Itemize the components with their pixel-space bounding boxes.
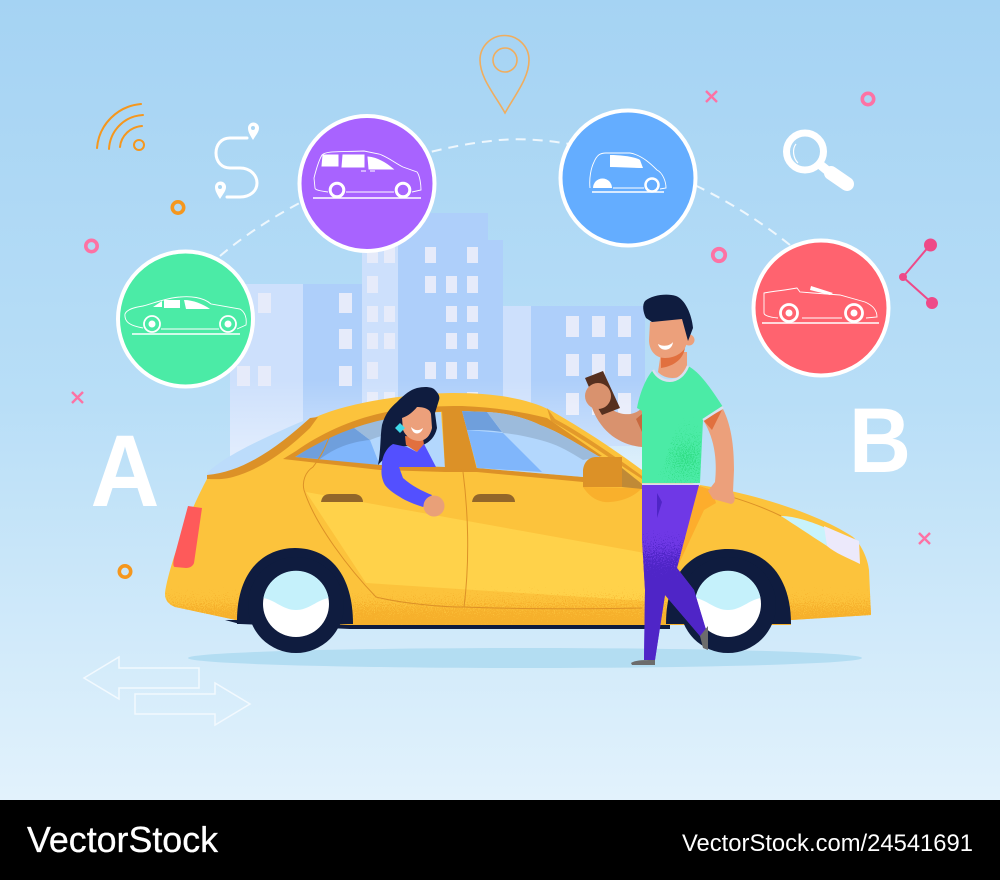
footer bar bbox=[0, 800, 1000, 880]
hand bbox=[424, 496, 444, 516]
rear glass reflection bbox=[207, 417, 318, 480]
front wheel bbox=[666, 549, 791, 653]
decorative cross: left bbox=[72, 392, 83, 403]
trousers crease bbox=[657, 493, 662, 518]
rear window bbox=[295, 412, 445, 467]
letter A: A bbox=[90, 414, 160, 528]
door seams bbox=[303, 435, 642, 609]
circle: purple van bbox=[300, 116, 434, 251]
decorative ring: orange upper bbox=[172, 202, 184, 213]
rear wheel bbox=[237, 548, 353, 653]
ground shadow bbox=[188, 648, 862, 668]
hood seam bbox=[700, 487, 781, 516]
side mirror bbox=[583, 487, 642, 502]
door handle front bbox=[472, 494, 515, 502]
underbody bbox=[225, 620, 670, 629]
neck bbox=[405, 436, 424, 452]
circle: blue city car bbox=[560, 110, 696, 246]
man with phone bbox=[585, 295, 735, 665]
decorative ring: orange lower bbox=[119, 566, 131, 577]
hair bbox=[378, 387, 439, 465]
arrows: two directions bbox=[84, 657, 250, 725]
earring bbox=[395, 423, 405, 433]
smile bbox=[658, 342, 673, 350]
front fender shadow bbox=[660, 485, 716, 570]
door highlight bbox=[306, 492, 645, 601]
taxi car bbox=[160, 393, 875, 653]
trousers bbox=[642, 485, 707, 660]
sleeve shadow bbox=[703, 410, 722, 430]
icon: wifi signal bbox=[97, 104, 144, 150]
decorative ring: pink top right bbox=[862, 93, 874, 105]
icon: small car outline bbox=[590, 153, 666, 192]
t-shirt grain bbox=[655, 415, 702, 483]
ear bbox=[684, 334, 694, 346]
near arm bbox=[591, 405, 642, 447]
circle: green sedan bbox=[118, 252, 253, 386]
decorative ring: pink left bbox=[86, 240, 97, 252]
door handle rear bbox=[321, 494, 363, 502]
logo text: VectorStock bbox=[27, 819, 219, 860]
sleeve cuff shadow bbox=[636, 414, 642, 432]
t-shirt bbox=[637, 366, 723, 483]
woman driver bbox=[378, 387, 444, 516]
tail light bbox=[173, 506, 202, 568]
neck bbox=[658, 352, 687, 378]
far arm bbox=[703, 409, 735, 504]
far shoe bbox=[700, 626, 708, 650]
icon: share nodes bbox=[899, 238, 938, 309]
city buildings bbox=[230, 213, 645, 470]
headlight bbox=[781, 516, 827, 546]
phone bbox=[585, 371, 620, 415]
face bbox=[402, 407, 432, 441]
smile bbox=[411, 427, 423, 434]
icon: convertible outline bbox=[762, 286, 879, 323]
icon: map pin bbox=[480, 36, 529, 113]
hand bbox=[585, 383, 611, 409]
decorative cross: right bbox=[919, 533, 930, 544]
textured bottom shading bbox=[165, 586, 871, 625]
blouse and arm bbox=[381, 444, 436, 507]
image id: VectorStock.com/24541691 bbox=[682, 830, 973, 857]
face bbox=[649, 316, 687, 358]
near shoe bbox=[631, 660, 655, 665]
rear pillar strip bbox=[207, 417, 318, 479]
icon: sedan outline bbox=[125, 297, 246, 334]
collar, sleeve and hem trim bbox=[642, 366, 723, 484]
neck shadow bbox=[661, 347, 685, 368]
roof flare and hood stripe bbox=[547, 408, 642, 479]
window frame bbox=[283, 406, 602, 482]
circle: red convertible bbox=[754, 240, 888, 376]
trousers shading bbox=[642, 530, 706, 660]
car body bbox=[165, 393, 871, 625]
decorative ring: pink centre right bbox=[713, 249, 725, 261]
front window bbox=[462, 411, 600, 477]
letter B: B bbox=[849, 390, 911, 492]
icon: van outline bbox=[313, 151, 421, 198]
icon: winding route with pins bbox=[215, 122, 259, 199]
dashed route arc bbox=[220, 139, 790, 256]
door pillar bbox=[442, 410, 477, 470]
hair bbox=[643, 295, 693, 341]
icon: magnifying glass bbox=[786, 133, 847, 184]
decorative cross: top bbox=[706, 91, 717, 102]
